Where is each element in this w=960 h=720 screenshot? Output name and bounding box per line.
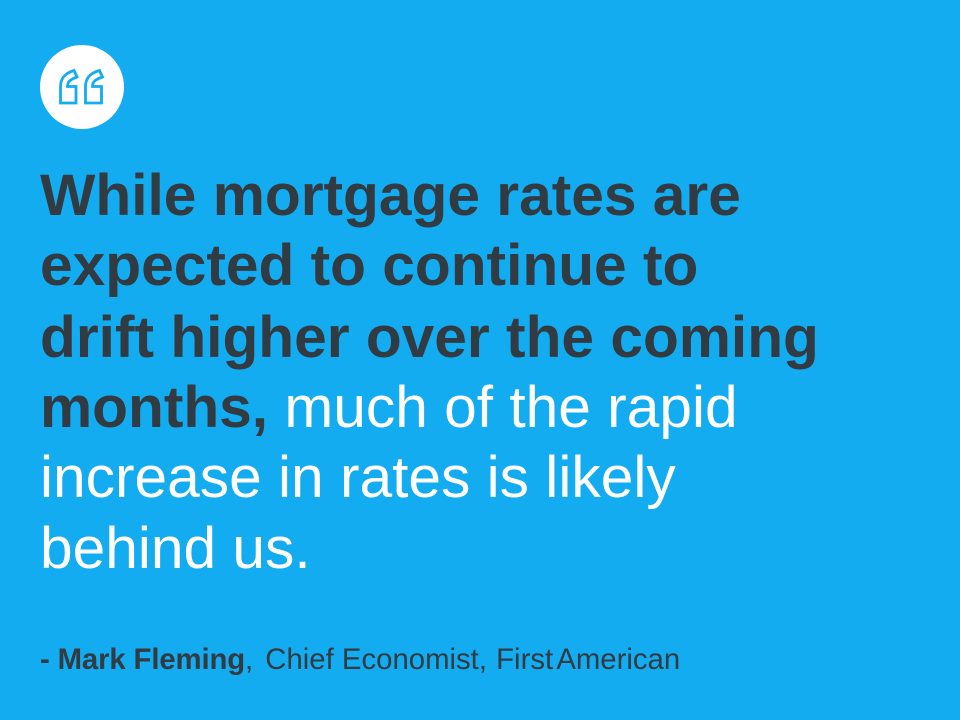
- quote text: months, much of the rapid: [40, 375, 738, 440]
- quote text: behind us.: [40, 516, 311, 581]
- attribution: - Mark Fleming, Chief Economist, First American: [40, 643, 680, 676]
- quote text: drift higher over the coming: [40, 305, 819, 370]
- icon: quotation mark in white circle: [40, 45, 124, 129]
- quote text: expected to continue to: [40, 233, 698, 298]
- quote text: increase in rates is likely: [40, 445, 676, 510]
- quote text: While mortgage rates are: [40, 163, 741, 228]
